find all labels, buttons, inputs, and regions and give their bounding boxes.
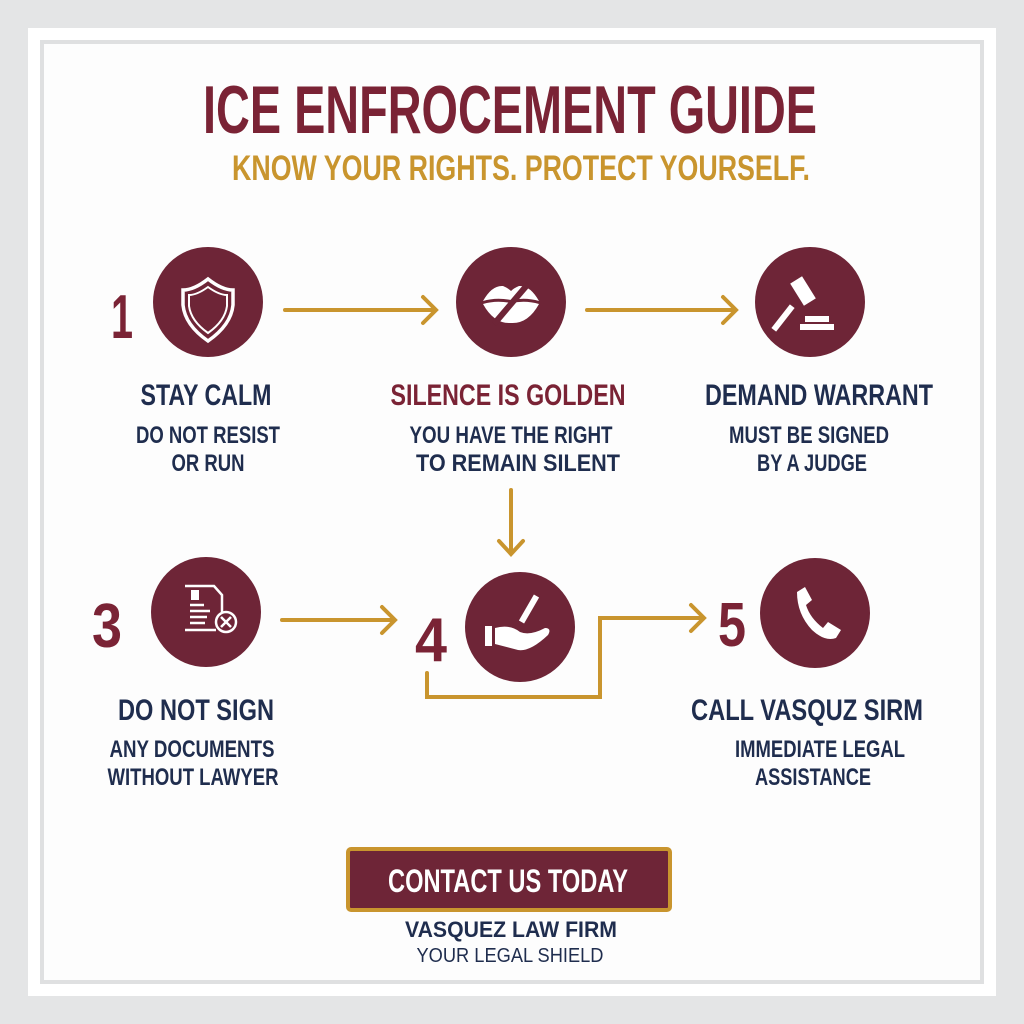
step 1: DO NOT RESIST (136, 422, 280, 449)
step 1: 1 (111, 283, 133, 352)
step 5: ASSISTANCE (755, 764, 871, 791)
step 5: 5 (718, 591, 746, 660)
contact button: CONTACT US TODAY (388, 863, 628, 899)
icon: gavel (771, 276, 834, 332)
icon: phone (797, 587, 841, 639)
step 2: YOU HAVE THE RIGHT (410, 422, 613, 449)
icon: lips crossed (483, 286, 539, 323)
step 3: DEMAND WARRANT (705, 379, 933, 412)
step 3 (705, 247, 933, 477)
arrow 3 to 4 (282, 607, 395, 633)
step 5: IMMEDIATE LEGAL (735, 736, 905, 763)
step 4 (415, 572, 575, 682)
arrow down to 4 (499, 490, 523, 554)
footer firm name (405, 917, 617, 967)
arrow 2 to 3 (587, 297, 736, 323)
footer firm name: YOUR LEGAL SHIELD (416, 945, 604, 967)
step 2: TO REMAIN SILENT (416, 450, 620, 477)
connector 4 to 5 (427, 605, 704, 697)
step 1 (111, 247, 280, 477)
subtitle: KNOW YOUR RIGHTS. PROTECT YOURSELF. (232, 149, 810, 188)
step 3 row2: do not sign: ANY DOCUMENTS (110, 736, 274, 763)
icon: document with x (185, 586, 236, 632)
step 2 (390, 247, 626, 477)
step 3 row2: do not sign: DO NOT SIGN (118, 694, 274, 727)
step 3 row2: do not sign: WITHOUT LAWYER (108, 764, 278, 791)
arrow 1 to 2 (285, 297, 436, 323)
contact button (348, 849, 670, 910)
footer firm name: VASQUEZ LAW FIRM (405, 917, 617, 942)
icon: shield (183, 279, 233, 341)
step 3 row2: do not sign: 3 (92, 592, 122, 661)
step 5 (691, 558, 923, 791)
step 3: MUST BE SIGNED (729, 422, 889, 449)
step 1: OR RUN (172, 450, 244, 477)
step 3: BY A JUDGE (757, 450, 867, 477)
step 1: STAY CALM (140, 379, 272, 412)
step 2: SILENCE IS GOLDEN (390, 379, 626, 412)
icon: hand with pen (485, 595, 549, 650)
step 5: CALL VASQUZ SIRM (691, 694, 923, 727)
step 4: 4 (415, 606, 447, 675)
step 3 row2: do not sign (92, 557, 278, 791)
